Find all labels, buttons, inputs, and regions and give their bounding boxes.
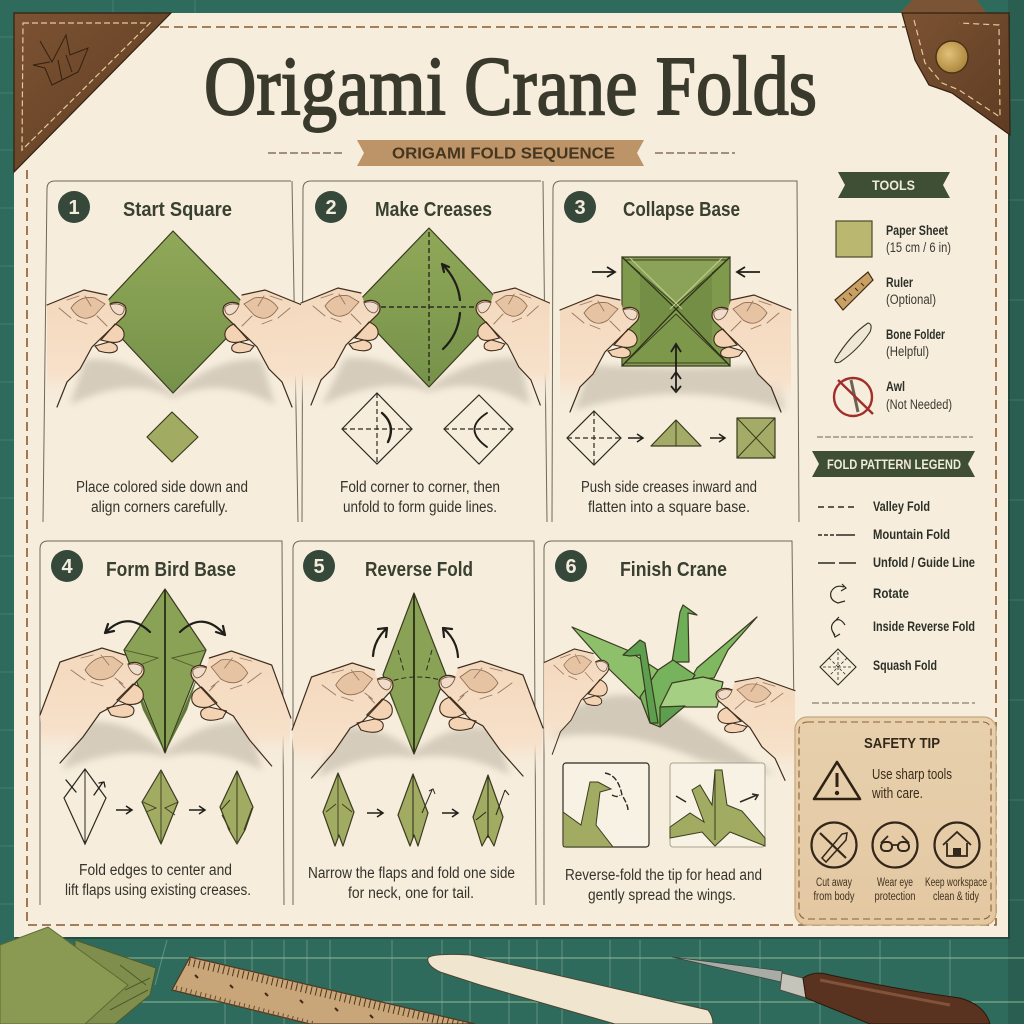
panel: step 5 reverse fold bbox=[292, 541, 543, 905]
legend ribbon bbox=[812, 451, 975, 477]
icon: cut away from body bbox=[812, 822, 856, 868]
tool: ruler bbox=[835, 272, 936, 310]
tool: paper sheet: (15 cm / 6 in) bbox=[886, 240, 951, 255]
panel: step 5 reverse fold: for neck, one for tail. bbox=[348, 885, 474, 902]
panel: safety tip: protection bbox=[874, 891, 916, 903]
panel: safety tip: from body bbox=[814, 891, 855, 903]
panel: step 6 finish crane: Reverse-fold the tip for head and bbox=[565, 867, 762, 884]
tool: awl crossed out bbox=[834, 378, 952, 416]
icon: warning triangle bbox=[814, 762, 860, 799]
subtitle banner: ORIGAMI FOLD SEQUENCE bbox=[392, 146, 615, 162]
panel: step 3 collapse base: 3 bbox=[574, 197, 586, 219]
panel: step 6 finish crane: gently spread the wings. bbox=[588, 887, 736, 904]
panel: safety tip: SAFETY TIP bbox=[864, 735, 940, 752]
legend: rotate bbox=[831, 584, 909, 603]
legend: valley fold: Valley Fold bbox=[873, 498, 930, 514]
panel: step 1 start square: Place colored side down and bbox=[76, 479, 248, 496]
crane bbox=[572, 605, 757, 727]
panel: safety tip: Wear eye bbox=[877, 877, 913, 889]
legend: inside reverse fold bbox=[832, 617, 975, 637]
tool: ruler: (Optional) bbox=[886, 292, 936, 307]
tool: bone folder: Bone Folder bbox=[886, 327, 946, 342]
panel: step 2 make creases bbox=[301, 181, 550, 522]
legend: unfold guide line: Unfold / Guide Line bbox=[873, 554, 975, 570]
panel: step 1 start square bbox=[43, 181, 302, 522]
panel: safety tip: with care. bbox=[871, 786, 923, 802]
panel: step 4 form bird base bbox=[40, 541, 291, 905]
panel: step 3 collapse base: Collapse Base bbox=[623, 198, 740, 221]
panel: step 6 finish crane: 6 bbox=[565, 556, 577, 578]
tool: bone folder: (Helpful) bbox=[886, 344, 929, 359]
tool: awl crossed out: (Not Needed) bbox=[886, 397, 952, 412]
tool: paper sheet bbox=[836, 221, 951, 257]
legend ribbon: FOLD PATTERN LEGEND bbox=[827, 457, 961, 472]
tools ribbon bbox=[838, 172, 950, 198]
inset: spread wings detail bbox=[670, 763, 765, 847]
panel: step 1 start square: 1 bbox=[68, 197, 80, 219]
panel: step 2 make creases: 2 bbox=[325, 197, 337, 219]
panel: step 1 start square: align corners carefully. bbox=[91, 499, 228, 516]
bird base kite bbox=[124, 589, 206, 753]
legend: mountain fold: Mountain Fold bbox=[873, 526, 950, 542]
panel: step 6 finish crane bbox=[544, 541, 795, 905]
legend: squash fold: Squash Fold bbox=[873, 657, 937, 673]
stack of green origami paper bbox=[0, 927, 156, 1024]
legend: mountain fold bbox=[818, 526, 950, 542]
panel: step 3 collapse base: Push side creases inward and bbox=[581, 479, 757, 496]
tools ribbon: TOOLS bbox=[872, 177, 915, 193]
subtitle banner bbox=[268, 140, 735, 166]
wooden ruler bbox=[172, 957, 475, 1024]
legend: inside reverse fold: Inside Reverse Fold bbox=[873, 618, 975, 634]
panel: step 2 make creases: unfold to form guide lines. bbox=[343, 499, 497, 516]
tool: bone folder bbox=[835, 323, 946, 363]
awl bbox=[672, 957, 990, 1024]
panel: fold pattern legend bbox=[812, 437, 975, 703]
panel: step 3 collapse base bbox=[552, 181, 799, 522]
tool: ruler: Ruler bbox=[886, 275, 914, 290]
panel: safety tip: Use sharp tools bbox=[872, 767, 952, 783]
title: Origami Crane Folds bbox=[204, 40, 817, 133]
tool: paper sheet: Paper Sheet bbox=[886, 223, 948, 238]
reverse fold kite bbox=[383, 593, 446, 754]
icon: keep workspace tidy bbox=[934, 822, 980, 868]
panel: step 4 form bird base: lift flaps using existing creases. bbox=[65, 882, 251, 899]
panel: step 5 reverse fold: Reverse Fold bbox=[365, 558, 473, 581]
legend: valley fold bbox=[818, 498, 930, 514]
icon: wear eye protection bbox=[872, 822, 918, 868]
panel: step 1 start square: Start Square bbox=[123, 198, 232, 221]
panel: safety tip bbox=[795, 717, 996, 925]
legend: squash fold bbox=[820, 649, 937, 685]
panel: step 4 form bird base: Form Bird Base bbox=[106, 558, 236, 581]
legend: rotate: Rotate bbox=[873, 585, 909, 601]
bone folder bbox=[428, 954, 713, 1024]
panel: step 5 reverse fold: Narrow the flaps and fold one side bbox=[308, 865, 515, 882]
panel: step 5 reverse fold: 5 bbox=[313, 556, 325, 578]
inset: head detail bbox=[563, 763, 649, 847]
panel: step 4 form bird base: 4 bbox=[61, 556, 73, 578]
panel: step 3 collapse base: flatten into a square base. bbox=[588, 499, 750, 516]
leather corner: top right with brass button bbox=[900, 0, 1010, 135]
panel: step 2 make creases: Make Creases bbox=[375, 198, 492, 221]
panel: safety tip: Cut away bbox=[816, 877, 852, 889]
panel: step 4 form bird base: Fold edges to center and bbox=[79, 862, 232, 879]
panel: safety tip: Keep workspace bbox=[925, 877, 987, 889]
tool: awl crossed out: Awl bbox=[886, 379, 905, 394]
panel: tools bbox=[834, 172, 952, 416]
panel: step 2 make creases: Fold corner to corner, then bbox=[340, 479, 500, 496]
leather corner: top left with crane mark bbox=[14, 13, 171, 172]
panel: safety tip: clean & tidy bbox=[933, 891, 979, 903]
panel: step 6 finish crane: Finish Crane bbox=[620, 558, 727, 581]
square base fold bbox=[622, 257, 730, 366]
